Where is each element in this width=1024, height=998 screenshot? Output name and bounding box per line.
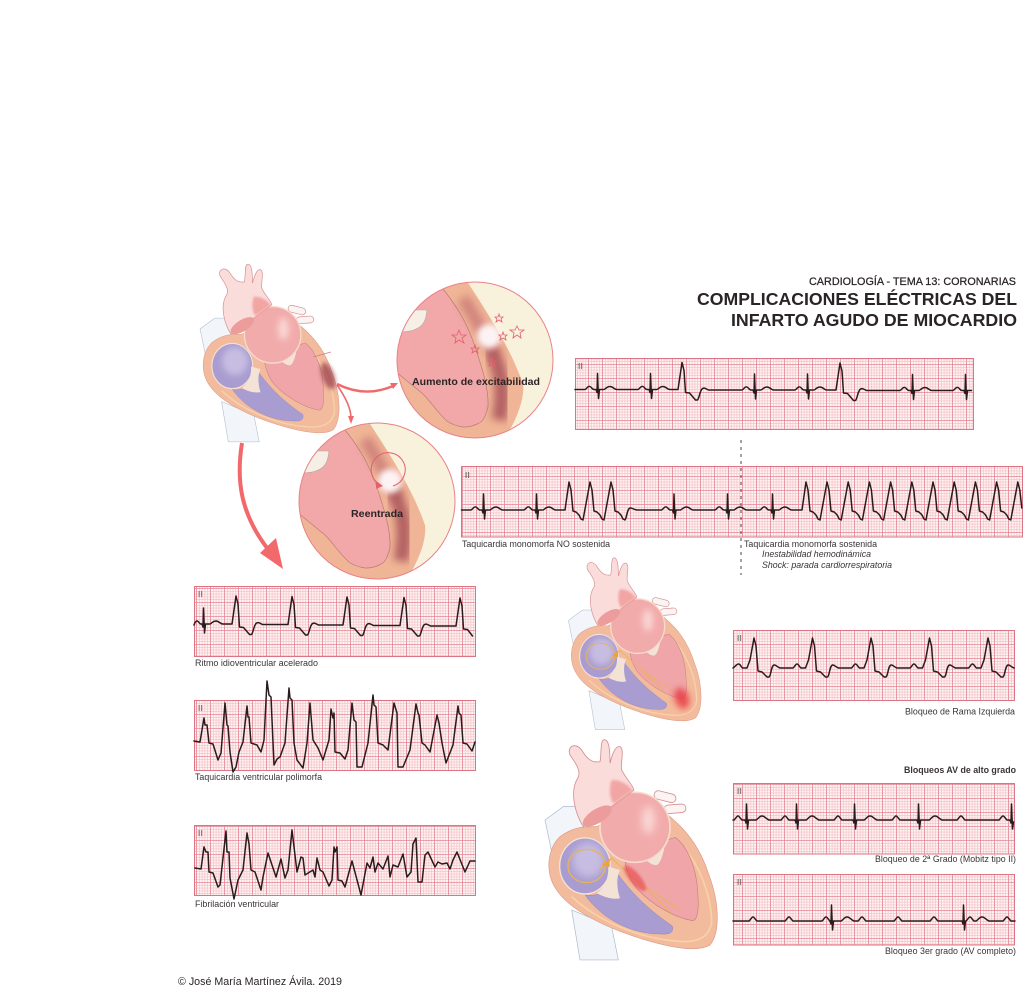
ECG: taquicardia monomorfa: II <box>465 471 470 480</box>
illustration: heart with septal lesion <box>545 740 717 960</box>
copyright: © José María Martínez Ávila. 2019 <box>178 975 342 988</box>
arrow: heart to ECG strips <box>240 443 283 569</box>
ECG: ritmo idioventricular acelerado: II <box>198 590 203 599</box>
label: NO sostenida: Taquicardia monomorfa NO sostenida <box>462 539 610 549</box>
arrow: infarct to reentry <box>337 385 354 424</box>
ECG: bloqueo 2º grado: II <box>737 787 742 796</box>
illustration: heart with lateral infarct <box>200 264 339 442</box>
ECG: fibrilación ventricular <box>194 826 476 899</box>
ECG: extrasístoles, monomorfa <box>575 358 974 430</box>
ECG: bloqueo de rama izquierda: II <box>737 634 742 643</box>
ECG: extrasístoles, monomorfa: II <box>578 362 583 371</box>
label: polimorfa: Taquicardia ventricular polimorfa <box>195 772 322 782</box>
ECG: bloqueo de rama izquierda <box>733 630 1014 700</box>
title: INFARTO AGUDO DE MIOCARDIO <box>731 310 1017 330</box>
arrow: infarct to excitability <box>337 383 398 392</box>
illustration: heart with apical lesion <box>568 558 701 730</box>
label: ritmo idioventricular: Ritmo idioventricular acelerado <box>195 658 318 668</box>
heading: bloqueos AV: Bloqueos AV de alto grado <box>904 765 1016 775</box>
label: sostenida: Inestabilidad hemodinámica <box>762 549 871 559</box>
title: COMPLICACIONES ELÉCTRICAS DEL <box>697 288 1017 309</box>
ECG: taquicardia ventricular polimorfa: II <box>198 704 203 713</box>
ECG: taquicardia ventricular polimorfa <box>194 681 476 772</box>
panel: reentrada <box>298 422 456 580</box>
title <box>697 288 1017 330</box>
label: bloqueo 2º grado: Bloqueo de 2ª Grado (Mobitz tipo II) <box>875 854 1016 864</box>
panel: aumento de excitabilidad: Aumento de excitabilidad <box>412 376 540 388</box>
ECG: bloqueo 3er grado: II <box>737 878 742 887</box>
label: sostenida: Taquicardia monomorfa sostenida <box>744 539 877 549</box>
header: subject line: CARDIOLOGÍA - TEMA 13: CORONARIAS <box>809 275 1016 288</box>
ECG: fibrilación ventricular: II <box>198 829 203 838</box>
label: sostenida <box>744 539 892 570</box>
ECG: bloqueo 2º grado <box>733 784 1014 854</box>
panel: reentrada: Reentrada <box>351 508 403 520</box>
label: bloqueo 3er grado: Bloqueo 3er grado (AV completo) <box>885 946 1016 956</box>
label: sostenida: Shock: parada cardiorrespiratoria <box>762 560 892 570</box>
divider: NO sostenida / sostenida <box>740 440 742 575</box>
label: rama izquierda: Bloqueo de Rama Izquierda <box>905 706 1015 716</box>
label: fibrilación: Fibrilación ventricular <box>195 899 279 909</box>
panel: aumento de excitabilidad <box>396 282 554 438</box>
ECG: bloqueo 3er grado <box>733 874 1015 945</box>
ECG: taquicardia monomorfa <box>462 466 1022 537</box>
ECG: ritmo idioventricular acelerado <box>194 586 476 656</box>
